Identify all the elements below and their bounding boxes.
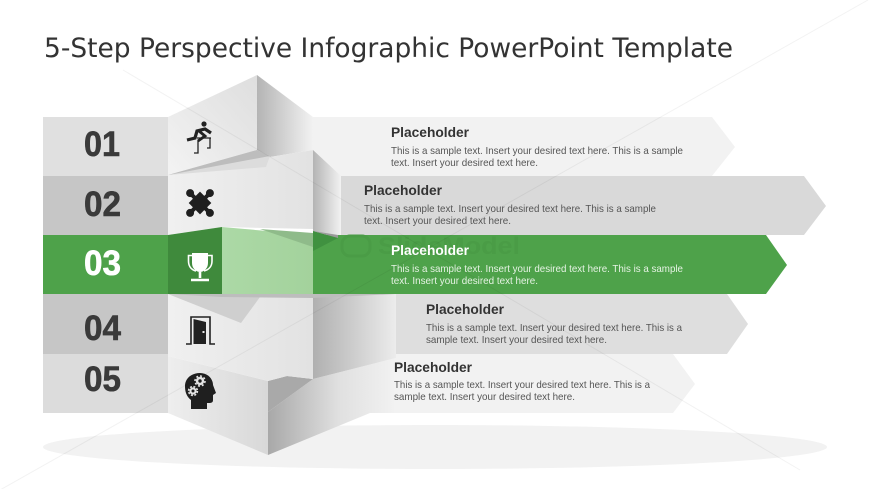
number box 03 [43,235,168,294]
arrow 4 body: This is a sample text. Insert your desired text here. This is a [426,322,682,334]
arrow 1 body: This is a sample text. Insert your desired text here. This is a sample [391,145,683,157]
arrow 5 [394,354,695,413]
arrow 2 [341,176,826,235]
arrow 3 heading: Placeholder [391,242,470,258]
arrow 4 [396,294,748,354]
arrow 4 body: sample text. Insert your desired text here. [426,334,607,346]
arrow 2 body: This is a sample text. Insert your desired text here. This is a sample [364,203,656,215]
number box 01 [43,117,168,176]
3D block 1 [168,75,313,175]
title: 5-Step Perspective Infographic PowerPoint Template [44,33,733,64]
number box 05 [43,354,168,413]
arrow 3 body: This is a sample text. Insert your desired text here. This is a sample [391,263,683,275]
3D block 4 [168,294,396,381]
3D block 2 [168,150,341,235]
arrow 5 heading: Placeholder [394,359,473,375]
3D block 5 [168,356,396,455]
number box 04 [43,294,168,354]
icon: hurdler [187,121,211,153]
arrow 1 body: text. Insert your desired text here. [391,157,538,169]
3D block 3 [168,227,396,298]
floor shadow [43,425,827,469]
arrow 2 body: text. Insert your desired text here. [364,215,511,227]
icon: door [186,317,215,344]
number box 02 [43,176,168,235]
arrow 5 body: This is a sample text. Insert your desired text here. This is a [394,379,650,391]
arrow 3 body: text. Insert your desired text here. [391,275,538,287]
arrow 1 [313,117,735,176]
icon: trophy [188,253,212,280]
number box 05: 05 [84,360,121,399]
icon: puzzle piece [175,178,225,228]
number box 04: 04 [84,309,122,348]
arrow 2 heading: Placeholder [364,182,443,198]
number box 02: 02 [84,185,121,224]
number box 01: 01 [84,125,120,164]
watermark logo and text: SlideModel [378,233,520,260]
arrow 1 heading: Placeholder [391,124,470,140]
arrow 3 [313,233,787,294]
arrow 4 heading: Placeholder [426,301,505,317]
number box 03: 03 [84,244,121,283]
arrow 5 body: sample text. Insert your desired text here. [394,391,575,403]
icon: head with gears [185,373,216,409]
